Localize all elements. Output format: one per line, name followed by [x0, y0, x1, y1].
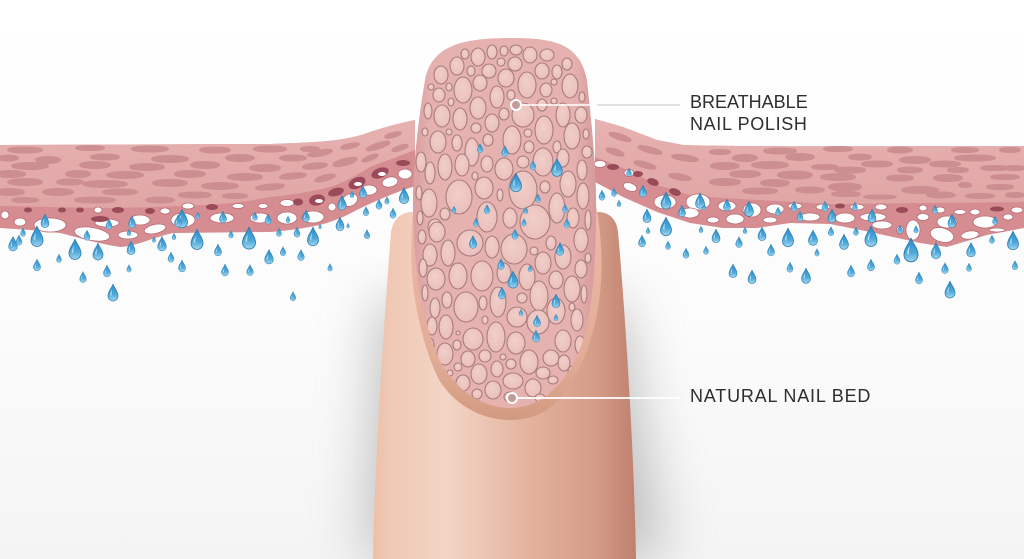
drops on nail	[452, 144, 570, 342]
leader line: natural nail bed	[507, 393, 680, 403]
label: natural nail bed: NATURAL NAIL BED	[690, 386, 871, 406]
finger	[373, 205, 636, 559]
polish pores	[416, 45, 592, 402]
surface pores	[606, 131, 1024, 198]
right skin membrane	[594, 119, 1024, 247]
finger cast shadow	[368, 300, 662, 559]
nail groove shadow	[411, 205, 602, 420]
water drops left	[9, 186, 409, 301]
label: breathable nail polish: NAIL POLISH	[690, 114, 808, 134]
lattice holes	[1, 169, 412, 244]
nail with breathable polish	[413, 38, 596, 408]
lattice holes	[594, 160, 1023, 245]
water drops right	[599, 168, 1018, 298]
leader line: breathable nail polish	[511, 100, 680, 110]
surface pores	[0, 131, 408, 202]
left skin membrane	[0, 120, 415, 247]
label: breathable nail polish: BREATHABLE	[690, 92, 808, 112]
